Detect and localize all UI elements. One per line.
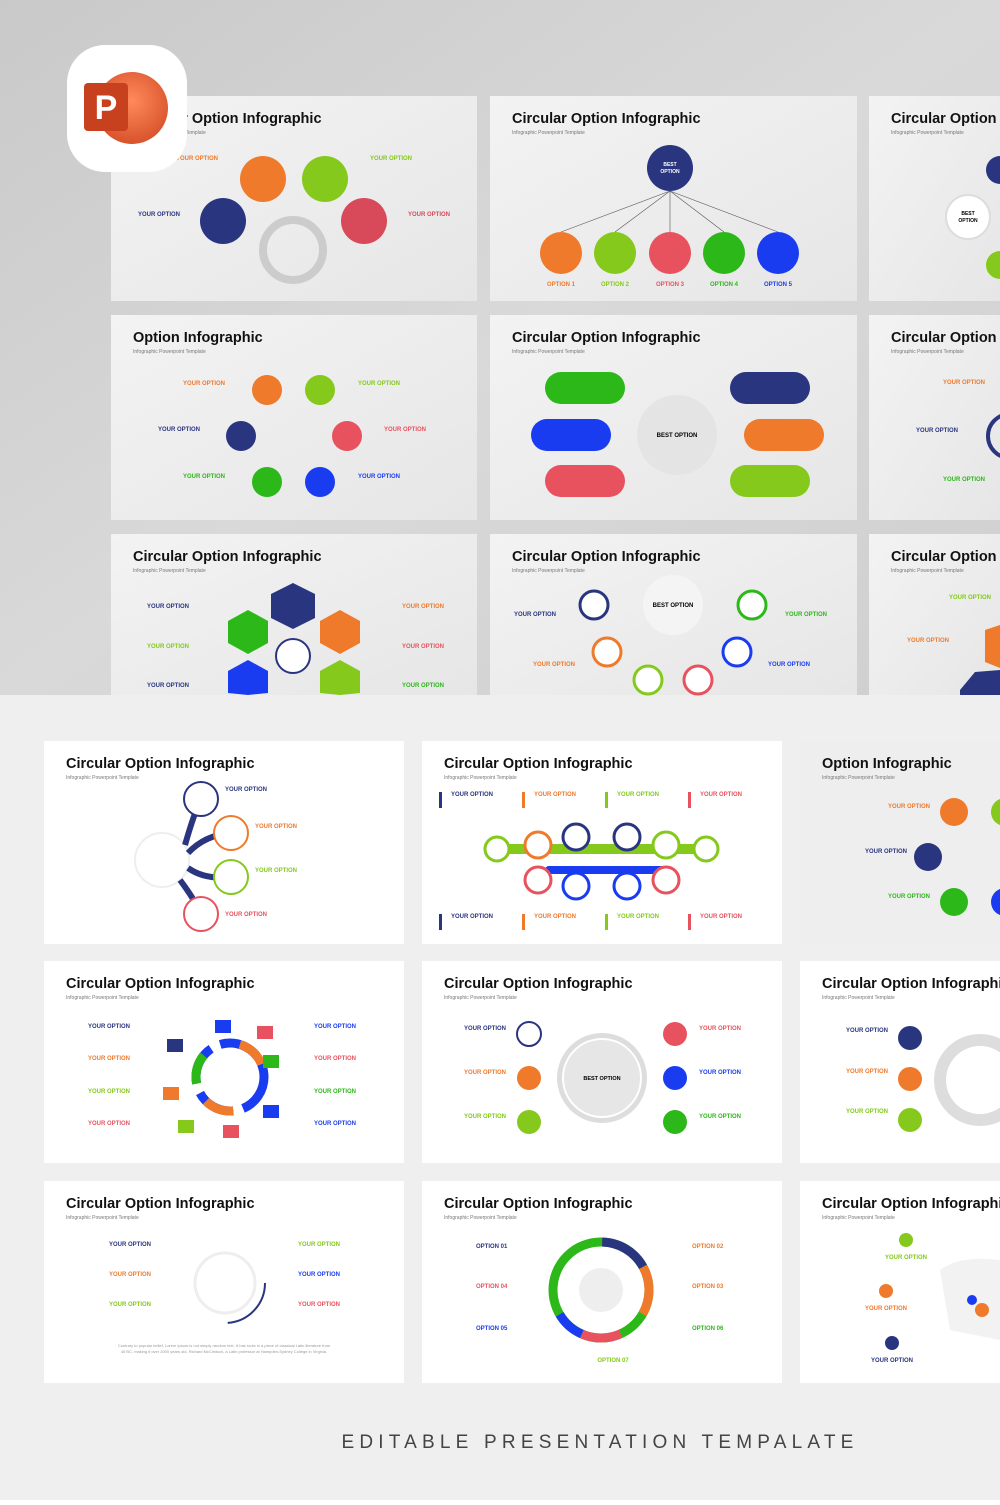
slide: bottom row2 col2: YOUR OPTION: [699, 1026, 741, 1032]
slide: bottom row3 col2: OPTION 03: [692, 1284, 724, 1290]
background top: [0, 0, 1000, 695]
slide: top row2 col1: YOUR OPTION: [358, 381, 400, 387]
slide: bottom row3 col2: OPTION 05: [476, 1326, 508, 1332]
slide: top row3 col3: YOUR OPTION: [949, 595, 991, 601]
slide: top row2 col1: YOUR OPTION: [358, 474, 400, 480]
slide: bottom row2 col1: YOUR OPTION: [314, 1056, 356, 1062]
slide: top row1 col2: BEST: [663, 162, 677, 168]
slide: bottom row1 col2: YOUR OPTION: [617, 792, 659, 798]
slide: top row1 col2: OPTION 1: [547, 282, 576, 288]
slide: bottom row2 col1: [44, 961, 404, 1163]
slide: bottom row3 col3: [800, 1181, 1000, 1383]
slide: bottom row3 col2: OPTION 01: [476, 1244, 508, 1250]
slide: top row1 col2: OPTION 2: [601, 282, 630, 288]
slide: top row2 col1: YOUR OPTION: [158, 427, 200, 433]
slide: bottom row3 col3: YOUR OPTION: [871, 1358, 913, 1364]
slide: bottom row3 col3: Infographic Powerpoint Template: [822, 1215, 895, 1221]
slide: bottom row2 col2: YOUR OPTION: [464, 1114, 506, 1120]
slide: top row2 col2: Circular Option Infographic: [512, 330, 701, 346]
slide: top row1 col1: YOUR OPTION: [408, 212, 450, 218]
slide: top row2 col2: Infographic Powerpoint Template: [512, 349, 585, 355]
slide: bottom row3 col1: Contrary to popular belief, Lorem Ipsum is not simply random text. It has roots in a piece of classical Latin literature from: [118, 1343, 331, 1348]
slide: top row2 col1: YOUR OPTION: [183, 381, 225, 387]
slide: bottom row1 col2: YOUR OPTION: [534, 914, 576, 920]
slide: top row3 col1: Circular Option Infographic: [133, 549, 322, 565]
slide: bottom row1 col1: YOUR OPTION: [255, 868, 297, 874]
slide: top row1 col2: OPTION 3: [656, 282, 685, 288]
slide: bottom row1 col1: YOUR OPTION: [255, 824, 297, 830]
slide: bottom row2 col1: YOUR OPTION: [88, 1024, 130, 1030]
slide: top row1 col3: Infographic Powerpoint Template: [891, 130, 964, 136]
slide: top row1 col1: YOUR OPTION: [176, 156, 218, 162]
slide: top row1 col3: BEST: [961, 211, 975, 217]
slide: bottom row1 col2: YOUR OPTION: [534, 792, 576, 798]
slide: bottom row1 col3: YOUR OPTION: [888, 804, 930, 810]
slide: bottom row2 col1: YOUR OPTION: [314, 1089, 356, 1095]
slide: bottom row1 col3: YOUR OPTION: [888, 894, 930, 900]
slide: bottom row2 col1: YOUR OPTION: [88, 1056, 130, 1062]
slide: bottom row3 col1: [44, 1181, 404, 1383]
slide: top row1 col2: OPTION: [660, 169, 680, 175]
slide: bottom row3 col1: YOUR OPTION: [109, 1242, 151, 1248]
slide: bottom row1 col3: YOUR OPTION: [865, 849, 907, 855]
slide: bottom row3 col1: YOUR OPTION: [298, 1272, 340, 1278]
slide: top row3 col2: Circular Option Infographic: [512, 549, 701, 565]
slide: top row1 col2: OPTION 4: [710, 282, 739, 288]
slide: bottom row2 col2: BEST OPTION: [583, 1076, 621, 1082]
slide: bottom row1 col2: Infographic Powerpoint Template: [444, 775, 517, 781]
slide: bottom row2 col2: YOUR OPTION: [464, 1070, 506, 1076]
slide: bottom row2 col2: YOUR OPTION: [699, 1070, 741, 1076]
slide: bottom row1 col2: [422, 741, 782, 944]
slide: top row1 col1: Infographic Powerpoint Template: [133, 130, 206, 136]
slide: bottom row2 col1: YOUR OPTION: [314, 1024, 356, 1030]
slide: top row2 col3: YOUR OPTION: [943, 380, 985, 386]
slide: top row3 col3: [869, 534, 1000, 695]
slide: bottom row2 col3: [800, 961, 1000, 1163]
slide: top row3 col1: YOUR OPTION: [147, 683, 189, 689]
slide: bottom row1 col2: YOUR OPTION: [451, 792, 493, 798]
slide: bottom row2 col2: YOUR OPTION: [699, 1114, 741, 1120]
slide: bottom row1 col3: Infographic Powerpoint Template: [822, 775, 895, 781]
slide: bottom row1 col2: YOUR OPTION: [700, 914, 742, 920]
slide: top row1 col1: YOUR OPTION: [370, 156, 412, 162]
slide: bottom row1 col2: Circular Option Infographic: [444, 756, 633, 772]
slide: bottom row2 col2: YOUR OPTION: [464, 1026, 506, 1032]
slide: top row3 col1: YOUR OPTION: [147, 604, 189, 610]
slide: bottom row3 col1: YOUR OPTION: [109, 1302, 151, 1308]
footer text: EDITABLE PRESENTATION TEMPALATE: [342, 1432, 858, 1453]
background bottom: [0, 695, 1000, 1500]
slide: bottom row1 col1: Infographic Powerpoint Template: [66, 775, 139, 781]
slide: top row3 col1: [111, 534, 477, 695]
slide: bottom row3 col1: YOUR OPTION: [109, 1272, 151, 1278]
slide: top row3 col1: Infographic Powerpoint Template: [133, 568, 206, 574]
slide: top row2 col1: [111, 315, 477, 520]
slide: top row2 col2: BEST OPTION: [657, 433, 697, 439]
slide: top row3 col1: YOUR OPTION: [402, 683, 444, 689]
slide: top row3 col1: YOUR OPTION: [402, 644, 444, 650]
slide: bottom row2 col1: YOUR OPTION: [314, 1121, 356, 1127]
slide: bottom row1 col1: YOUR OPTION: [225, 787, 267, 793]
slide: bottom row2 col3: Infographic Powerpoint Template: [822, 995, 895, 1001]
slide: top row3 col2: [490, 534, 857, 695]
slide: bottom row2 col3: YOUR OPTION: [846, 1028, 888, 1034]
slide: bottom row3 col1: YOUR OPTION: [298, 1242, 340, 1248]
slide: bottom row3 col2: OPTION 06: [692, 1326, 724, 1332]
slide: top row3 col2: YOUR OPTION: [768, 662, 810, 668]
slide: top row2 col1: Option Infographic: [133, 330, 263, 346]
slide: top row3 col2: YOUR OPTION: [514, 612, 556, 618]
slide: bottom row3 col2: OPTION 04: [476, 1284, 508, 1290]
slide: bottom row3 col1: Circular Option Infographic: [66, 1196, 255, 1212]
slide: bottom row1 col2: YOUR OPTION: [451, 914, 493, 920]
slide: bottom row1 col1: [44, 741, 404, 944]
slide: bottom row3 col2: Infographic Powerpoint Template: [444, 1215, 517, 1221]
slide: top row1 col3: [869, 96, 1000, 301]
slide: bottom row2 col3: YOUR OPTION: [846, 1109, 888, 1115]
slide: bottom row3 col1: Infographic Powerpoint Template: [66, 1215, 139, 1221]
slide: bottom row2 col3: YOUR OPTION: [846, 1069, 888, 1075]
slide: bottom row2 col1: YOUR OPTION: [88, 1089, 130, 1095]
slide: bottom row1 col3: Option Infographic: [822, 756, 952, 772]
slide: top row1 col1: [111, 96, 477, 301]
slide: top row1 col3: OPTION: [958, 218, 978, 224]
slide: top row1 col1: Circular Option Infographic: [133, 111, 322, 127]
slide: top row3 col1: YOUR OPTION: [147, 644, 189, 650]
slide: top row3 col2: Infographic Powerpoint Template: [512, 568, 585, 574]
slide: top row3 col2: BEST OPTION: [653, 603, 693, 609]
icon: powerpoint app: P: [95, 89, 117, 127]
slide: top row1 col2: Circular Option Infographic: [512, 111, 701, 127]
slide: bottom row2 col1: YOUR OPTION: [88, 1121, 130, 1127]
slide: bottom row1 col2: YOUR OPTION: [700, 792, 742, 798]
slide: top row2 col1: Infographic Powerpoint Template: [133, 349, 206, 355]
slide: top row1 col2: [490, 96, 857, 301]
slide: bottom row1 col3: [800, 741, 1000, 944]
slide: bottom row1 col1: YOUR OPTION: [225, 912, 267, 918]
slide: bottom row2 col1: Circular Option Infographic: [66, 976, 255, 992]
slide: top row2 col1: YOUR OPTION: [384, 427, 426, 433]
slide: top row2 col3: [869, 315, 1000, 520]
slide: bottom row3 col3: YOUR OPTION: [865, 1306, 907, 1312]
slide: bottom row3 col2: OPTION 07: [597, 1358, 629, 1364]
icon: powerpoint app: [67, 45, 187, 172]
slide: bottom row1 col2: YOUR OPTION: [617, 914, 659, 920]
slide: bottom row3 col1: 45 BC, making it over 2000 years old. Richard McClintock, a Latin professor at Hampden-Sydney College in Virginia.: [121, 1349, 327, 1354]
slide: bottom row2 col1: Infographic Powerpoint Template: [66, 995, 139, 1001]
slide: top row2 col3: YOUR OPTION: [943, 477, 985, 483]
slide: top row1 col2: OPTION 5: [764, 282, 793, 288]
slide: top row3 col3: Infographic Powerpoint Template: [891, 568, 964, 574]
slide: bottom row2 col2: Infographic Powerpoint Template: [444, 995, 517, 1001]
slide: bottom row3 col2: Circular Option Infographic: [444, 1196, 633, 1212]
slide: bottom row2 col2: [422, 961, 782, 1163]
slide: top row2 col2: [490, 315, 857, 520]
slide: bottom row1 col1: Circular Option Infographic: [66, 756, 255, 772]
slide: top row3 col2: YOUR OPTION: [785, 612, 827, 618]
slide: top row2 col3: Infographic Powerpoint Template: [891, 349, 964, 355]
slide: bottom row2 col2: Circular Option Infographic: [444, 976, 633, 992]
slide: bottom row3 col2: [422, 1181, 782, 1383]
slide: top row3 col3: YOUR OPTION: [907, 638, 949, 644]
slide: top row2 col3: YOUR OPTION: [916, 428, 958, 434]
slide: bottom row3 col3: YOUR OPTION: [885, 1255, 927, 1261]
slide: top row3 col1: YOUR OPTION: [402, 604, 444, 610]
slide: top row3 col2: YOUR OPTION: [533, 662, 575, 668]
slide: top row1 col1: YOUR OPTION: [138, 212, 180, 218]
slide: top row1 col2: Infographic Powerpoint Template: [512, 130, 585, 136]
slide: bottom row3 col2: OPTION 02: [692, 1244, 724, 1250]
slide: bottom row3 col1: YOUR OPTION: [298, 1302, 340, 1308]
slide: top row2 col1: YOUR OPTION: [183, 474, 225, 480]
